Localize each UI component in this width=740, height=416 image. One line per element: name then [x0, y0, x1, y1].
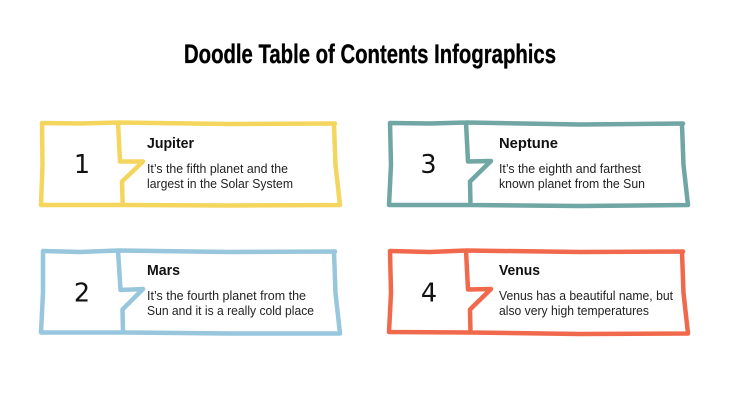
panel: Neptune [389, 122, 688, 206]
text: Venus description: also very high temperatures [499, 304, 649, 318]
number 2: 2 [74, 278, 90, 308]
number 3: 3 [420, 150, 437, 180]
heading: Venus: Venus [499, 262, 540, 279]
text: Mars description: Sun and it is a really cold place [147, 304, 314, 318]
heading: Neptune: Neptune [499, 135, 558, 152]
panel outline: Mars [41, 250, 340, 334]
title: Doodle Table of Contents Infographics [184, 39, 556, 69]
text: Jupiter description: It’s the fifth planet and the [147, 162, 288, 176]
panel: Mars [41, 250, 340, 334]
text: Neptune description: known planet from the Sun [499, 177, 645, 191]
number 1: 1 [74, 150, 90, 180]
heading: Mars: Mars [147, 262, 180, 279]
text: Jupiter description: largest in the Solar System [147, 177, 293, 191]
panel outline: Neptune [389, 122, 688, 206]
number 4: 4 [421, 278, 437, 308]
panel outline: Jupiter [41, 122, 340, 206]
heading: Jupiter: Jupiter [147, 135, 194, 152]
text: Neptune description: It’s the eighth and farthest [499, 162, 642, 176]
text: Mars description: It’s the fourth planet from the [147, 289, 306, 303]
panel: Venus [389, 250, 688, 334]
panel outline: Venus [389, 250, 688, 334]
panel: Jupiter [41, 122, 340, 206]
text: Venus description: Venus has a beautiful name, but [499, 289, 674, 303]
